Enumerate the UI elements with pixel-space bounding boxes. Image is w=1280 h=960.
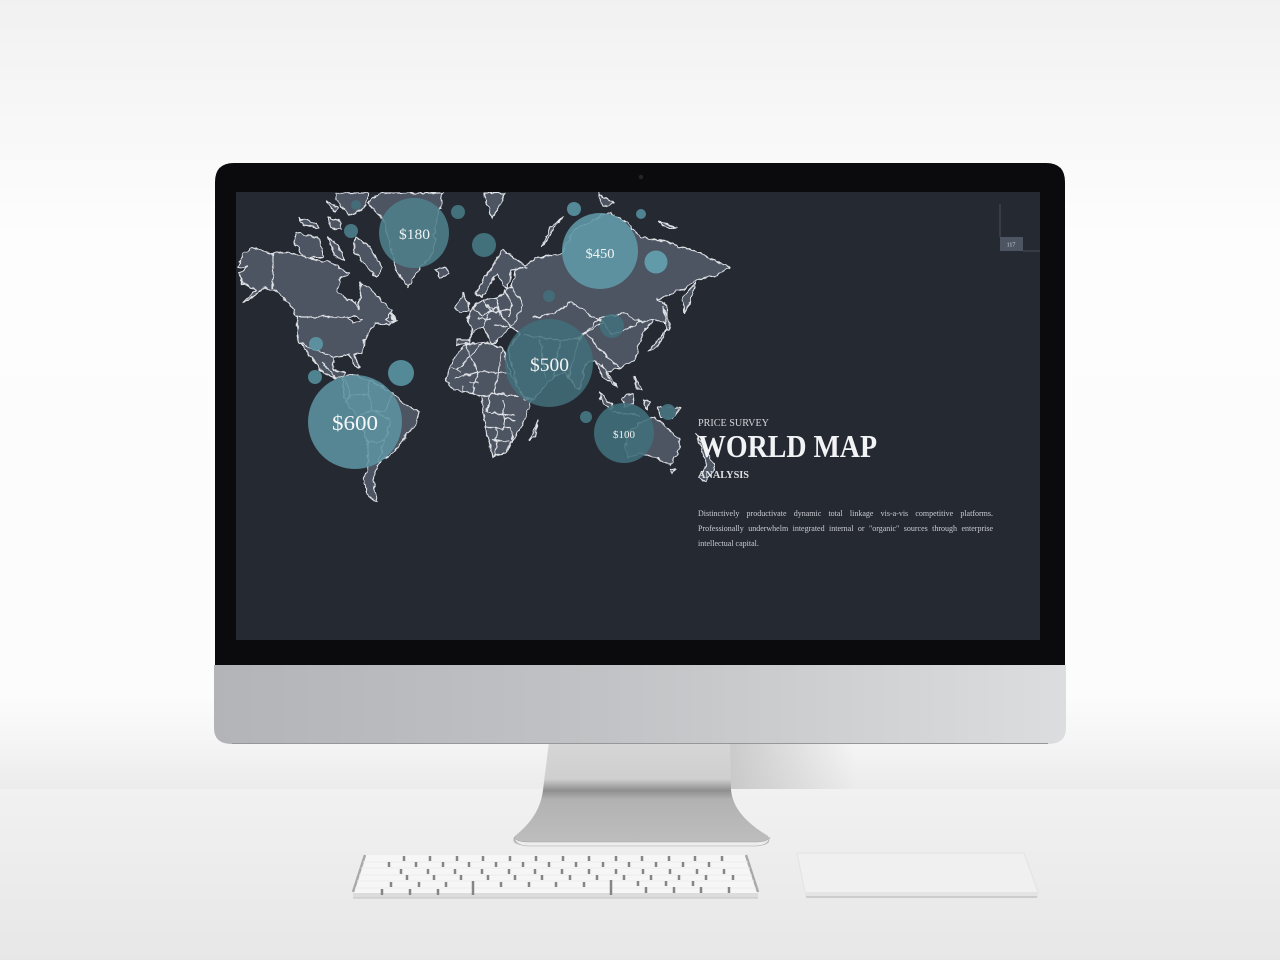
bubble: $500	[505, 319, 593, 407]
stand shadow on wall	[730, 744, 855, 789]
text: price survey: PRICE SURVEY	[698, 417, 769, 429]
data bubbles	[308, 198, 676, 469]
bubble: $180	[379, 198, 449, 268]
monitor bezel	[215, 163, 1065, 665]
text block: description: Professionally underwhelm integrated internal or "organic" sources through enterprise	[698, 524, 993, 532]
North America	[238, 248, 396, 378]
text block: description: intellectual capital.	[698, 539, 759, 548]
Eurasia	[457, 212, 730, 400]
background: desk	[0, 789, 1280, 960]
screen	[236, 192, 1040, 640]
text block: description	[698, 509, 993, 548]
bubble: $450	[562, 213, 638, 289]
small bubbles	[308, 200, 676, 423]
Tasmania	[670, 469, 675, 474]
keyboard	[353, 855, 758, 898]
text block: description: Distinctively productivate dynamic total linkage vis-a-vis competitive platforms.	[698, 509, 993, 518]
keyboard key gaps	[382, 856, 733, 895]
bubble: $180: $180	[399, 227, 430, 243]
trackpad	[797, 853, 1038, 897]
bubble: $100: $100	[613, 429, 636, 441]
keyboard row gaps	[355, 862, 756, 888]
Africa	[445, 342, 532, 457]
Australia	[625, 417, 680, 465]
South America	[343, 374, 419, 502]
bubble: $100	[594, 403, 654, 463]
borders	[273, 254, 393, 462]
bubble: $600: $600	[332, 411, 378, 435]
monitor chin	[214, 665, 1066, 744]
Great Lakes	[347, 316, 362, 323]
page number tag	[1000, 204, 1040, 251]
bubble: $500: $500	[530, 355, 569, 376]
monitor	[214, 163, 1066, 744]
monitor stand	[513, 742, 770, 846]
text: analysis: ANALYSIS	[698, 469, 749, 481]
page number tag: 117	[1007, 242, 1015, 248]
Arctic islands	[294, 193, 677, 322]
Greenland	[368, 193, 443, 288]
keyboard base	[353, 855, 758, 898]
New Zealand	[696, 433, 715, 482]
world map	[238, 193, 730, 502]
East Asia islands	[600, 282, 697, 418]
Madagascar	[530, 420, 538, 440]
title: world map: WORLD MAP	[698, 428, 877, 464]
bubble: $600	[308, 375, 402, 469]
Scandinavia and Britain	[455, 250, 527, 313]
camera	[639, 175, 643, 179]
bubble: $450: $450	[586, 247, 614, 262]
